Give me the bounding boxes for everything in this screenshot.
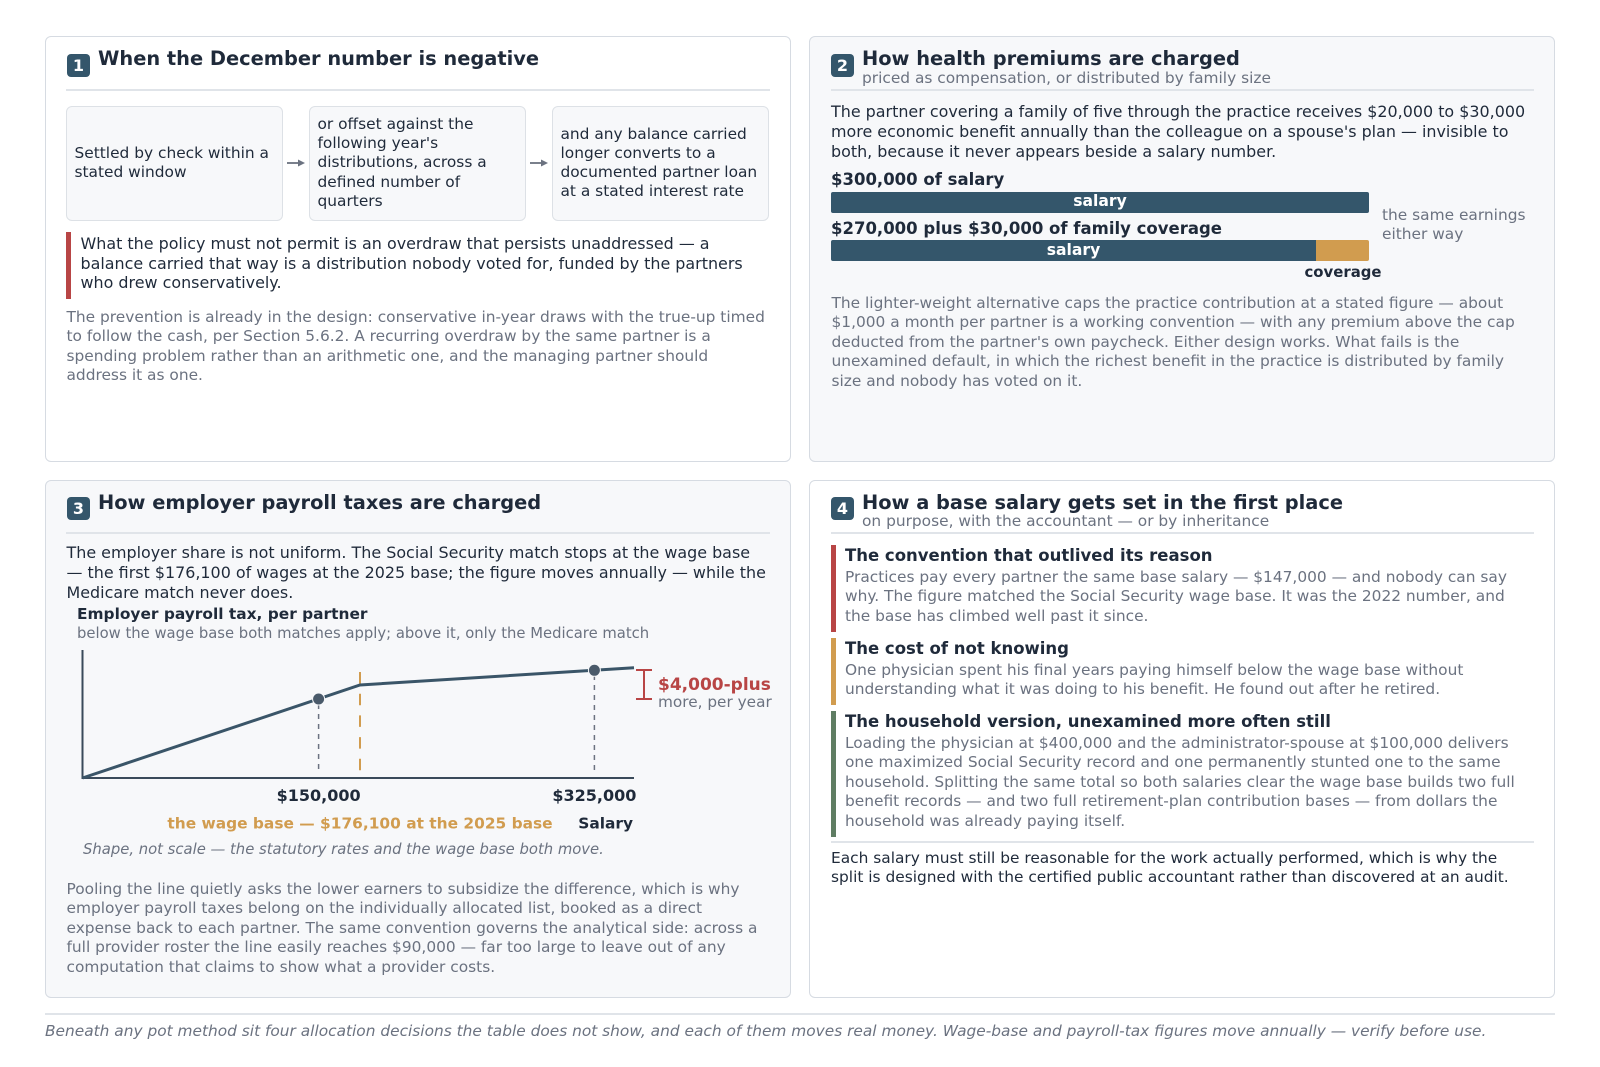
panel 1 closing text: spending problem rather than an arithmetic one, and the managing partner should bbox=[66, 347, 708, 365]
bar chart: salary vs coverage: salary bbox=[1073, 192, 1127, 210]
item: the cost of not knowing bbox=[831, 638, 1464, 705]
flow box: settled by check bbox=[66, 106, 283, 220]
chart note: Shape, not scale — the statutory rates and the wage base both move. bbox=[83, 841, 604, 858]
bar chart: salary vs coverage bbox=[831, 170, 1525, 281]
item: the convention that outlived its reason bbox=[831, 545, 1507, 632]
panel 2 closing text bbox=[831, 294, 1515, 390]
panel 2 heading: How health premiums are charged bbox=[862, 47, 1240, 70]
line chart: employer payroll tax: $150,000 bbox=[277, 786, 361, 805]
panel 3 intro text: The employer share is not uniform. The Social Security match stops at the wage base bbox=[66, 542, 750, 562]
panel 2 intro text bbox=[830, 102, 1525, 160]
callout: what the policy must not permit bbox=[66, 232, 743, 299]
item: the convention that outlived its reason: why. The figure matched the Social Security wage base. It was the 2022 number, and bbox=[845, 587, 1505, 605]
flow box: partner loan: documented partner loan bbox=[560, 163, 757, 181]
badge 3: 3 bbox=[73, 499, 84, 518]
panel 2 intro text: The partner covering a family of five through the practice receives $20,000 to $30,000 bbox=[831, 102, 1525, 120]
panel 1 closing text: to follow the cash, per Section 5.6.2. A recurring overdraw by the same partner is a bbox=[66, 327, 711, 345]
item: the convention that outlived its reason: The convention that outlived its reason bbox=[845, 546, 1213, 565]
flow box: offset: following year's bbox=[318, 134, 438, 152]
panel 2 subtitle: priced as compensation, or distributed by family size bbox=[862, 69, 1271, 87]
panel 3 heading: How employer payroll taxes are charged bbox=[98, 491, 541, 514]
flow box: partner loan bbox=[552, 106, 769, 220]
panel 3 intro text: — the first $176,100 of wages at the 2025 base; the figure moves annually — while the bbox=[66, 562, 766, 582]
flow box: offset: distributions, across a bbox=[318, 153, 487, 171]
callout: what the policy must not permit: who drew conservatively. bbox=[80, 273, 282, 292]
panel 3 closing text bbox=[66, 880, 757, 976]
callout: what the policy must not permit: balance carried that way is a distribution nobody voted for, funded by the partners bbox=[80, 254, 743, 273]
panel 4 heading: How a base salary gets set in the first place bbox=[862, 491, 1343, 514]
item: the cost of not knowing: The cost of not knowing bbox=[845, 639, 1069, 658]
panel 2 closing text: $1,000 a month per partner is a working convention — with any premium above the cap bbox=[832, 313, 1515, 331]
arrow bbox=[530, 160, 548, 166]
line chart: employer payroll tax bbox=[82, 650, 772, 832]
line chart: employer payroll tax: $4,000-plus bbox=[658, 675, 771, 695]
badge 2 bbox=[831, 54, 854, 77]
item: the household version: one maximized Social Security record and one permanently stunted one to the same bbox=[845, 753, 1501, 771]
item: the household version: household. Splitting the same total so both salaries clear the wage base builds two full bbox=[845, 773, 1515, 791]
bar chart: salary vs coverage: the same earnings bbox=[1382, 206, 1525, 224]
badge 4: 4 bbox=[837, 499, 848, 518]
panel 4 closing text bbox=[831, 849, 1509, 886]
badge 2: 2 bbox=[837, 56, 848, 75]
panel 3 intro text bbox=[66, 542, 766, 602]
panel 4 closing text: split is designed with the certified public accountant rather than discovered at an audit. bbox=[831, 868, 1509, 886]
badge 1: 1 bbox=[73, 56, 84, 75]
bar chart: salary vs coverage: salary bbox=[1047, 241, 1100, 259]
flow box: partner loan: at a stated interest rate bbox=[560, 182, 744, 200]
flow box: offset: quarters bbox=[318, 192, 383, 210]
item: the convention that outlived its reason: Practices pay every partner the same base salary — $147,000 — and nobody can say bbox=[845, 568, 1507, 586]
panel: how health premiums are charged bbox=[809, 36, 1555, 462]
bar chart: salary vs coverage: $270,000 plus $30,000 of family coverage bbox=[831, 218, 1222, 238]
line chart: employer payroll tax: the wage base — $176,100 at the 2025 base bbox=[167, 814, 553, 832]
flow box: partner loan: and any balance carried bbox=[560, 125, 747, 143]
line chart: employer payroll tax: more, per year bbox=[658, 693, 772, 711]
item: the household version: Loading the physician at $400,000 and the administrator-spouse at $100,000 delivers bbox=[845, 734, 1509, 752]
item: the cost of not knowing: understanding what it was doing to his benefit. He found out after he retired. bbox=[845, 680, 1440, 698]
arrow bbox=[287, 160, 305, 166]
item: the household version: The household version, unexamined more often still bbox=[845, 712, 1331, 731]
panel: when the December number is negative bbox=[45, 36, 791, 462]
badge 3 bbox=[67, 497, 90, 520]
badge 1 bbox=[67, 54, 90, 77]
panel 3 closing text: employer payroll taxes belong on the individually allocated list, booked as a direct bbox=[66, 899, 702, 917]
panel 3 intro text: Medicare match never does. bbox=[66, 582, 293, 602]
panel: how a base salary gets set bbox=[809, 480, 1555, 998]
panel 3 closing text: Pooling the line quietly asks the lower earners to subsidize the difference, which is why bbox=[66, 880, 739, 898]
panel 3 closing text: full provider roster the line easily reaches $90,000 — far too large to leave out of any bbox=[66, 938, 726, 956]
chart subtitle: below the wage base both matches apply; above it, only the Medicare match bbox=[77, 625, 649, 642]
flow box: settled by check: stated window bbox=[74, 163, 187, 181]
panel 2 closing text: unexamined default, in which the richest benefit in the practice is distributed by family bbox=[832, 352, 1504, 370]
badge 4 bbox=[831, 497, 854, 520]
item: the household version bbox=[831, 711, 1515, 837]
panel 2 closing text: The lighter-weight alternative caps the practice contribution at a stated figure — about bbox=[832, 294, 1503, 312]
panel 3 closing text: expense back to each partner. The same convention governs the analytical side: across a bbox=[66, 919, 757, 937]
panel 1 closing text: address it as one. bbox=[66, 366, 203, 384]
flow box: offset: defined number of bbox=[318, 173, 460, 191]
bar chart: salary vs coverage: coverage bbox=[1304, 263, 1382, 281]
panel 2 intro text: both, because it never appears beside a salary number. bbox=[831, 142, 1276, 160]
panel 4 subtitle: on purpose, with the accountant — or by inheritance bbox=[862, 512, 1269, 530]
line chart: employer payroll tax: $325,000 bbox=[552, 786, 636, 805]
panel 1 closing text bbox=[66, 308, 765, 384]
flow box: offset: or offset against the bbox=[318, 115, 473, 133]
bar chart: salary vs coverage: $300,000 of salary bbox=[831, 170, 1004, 189]
panel: how employer payroll taxes are charged bbox=[45, 480, 791, 998]
flow box: offset bbox=[309, 106, 526, 220]
panel 2 closing text: deducted from the partner's own paycheck. Either design works. What fails is the bbox=[832, 333, 1459, 351]
flow box: partner loan: longer converts to a bbox=[560, 144, 716, 162]
chart title: Employer payroll tax, per partner bbox=[77, 605, 367, 623]
panel 1 closing text: The prevention is already in the design: conservative in-year draws with the true-up timed bbox=[66, 308, 765, 326]
line chart: employer payroll tax: Salary bbox=[578, 814, 633, 832]
panel 1 heading: When the December number is negative bbox=[98, 47, 539, 70]
panel 2 closing text: size and nobody has voted on it. bbox=[832, 372, 1082, 390]
panel 3 closing text: computation that claims to show what a provider costs. bbox=[66, 958, 495, 976]
item: the household version: household was already paying itself. bbox=[845, 812, 1125, 830]
bar chart: salary vs coverage: either way bbox=[1382, 225, 1463, 243]
panel 2 intro text: more economic benefit annually than the colleague on a spouse's plan — invisible to bbox=[831, 122, 1508, 140]
callout: what the policy must not permit: What the policy must not permit is an overdraw that persists unaddressed — a bbox=[80, 234, 710, 253]
item: the convention that outlived its reason: the base has climbed well past it since. bbox=[845, 607, 1148, 625]
flow box: settled by check: Settled by check within a bbox=[74, 144, 269, 162]
item: the cost of not knowing: One physician spent his final years paying himself below the wage base without bbox=[845, 661, 1463, 679]
footer note: Beneath any pot method sit four allocation decisions the table does not show, and each of them moves real money. Wage-base and payroll-tax figures move annually — verify before use. bbox=[45, 1022, 1486, 1040]
panel 4 closing text: Each salary must still be reasonable for the work actually performed, which is why the bbox=[831, 849, 1497, 867]
item: the household version: benefit records — and two full retirement-plan contribution bases — from dollars the bbox=[845, 792, 1497, 810]
